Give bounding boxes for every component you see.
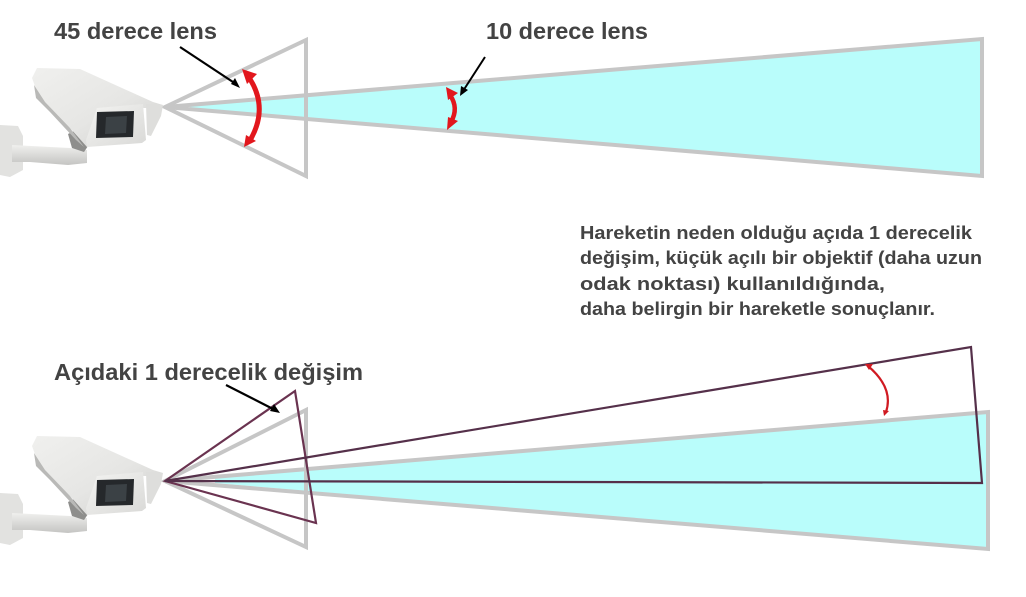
panel: bottom angle change comparison — [0, 347, 988, 549]
shifted 10 degree beam — [165, 347, 982, 483]
camera: bottom — [0, 436, 163, 545]
heading: 10 derece lens: 10 derece lens — [486, 18, 648, 44]
10 degree beam — [165, 39, 982, 176]
text block: explanation: Hareketin neden olduğu açıda 1 derecelik — [580, 222, 973, 243]
text block: explanation: değişim, küçük açılı bir objektif (daha uzun — [580, 247, 982, 268]
arrow: 45 degree pointer — [180, 47, 240, 88]
panel: top lens comparison — [0, 39, 982, 177]
heading: 45 derece lens: 45 derece lens — [54, 18, 217, 44]
arrow: 10 degree angle — [446, 87, 458, 130]
10 degree beam — [165, 412, 988, 549]
text block: explanation: odak noktası) kullanıldığında, — [580, 273, 885, 294]
45 degree triangle — [165, 410, 306, 547]
arrow: 10 degree pointer — [460, 57, 485, 96]
camera: top — [0, 68, 163, 177]
arrow: 1 degree angle — [865, 364, 889, 416]
45 degree triangle — [165, 40, 306, 176]
shifted 45 degree triangle — [165, 391, 316, 523]
arrow: 1 degree pointer — [226, 385, 280, 413]
arrow: 45 degree angle — [242, 69, 259, 147]
text block: explanation: daha belirgin bir hareketle sonuçlanır. — [580, 298, 935, 319]
heading: 1 degree change: Açıdaki 1 derecelik değişim — [54, 359, 363, 385]
